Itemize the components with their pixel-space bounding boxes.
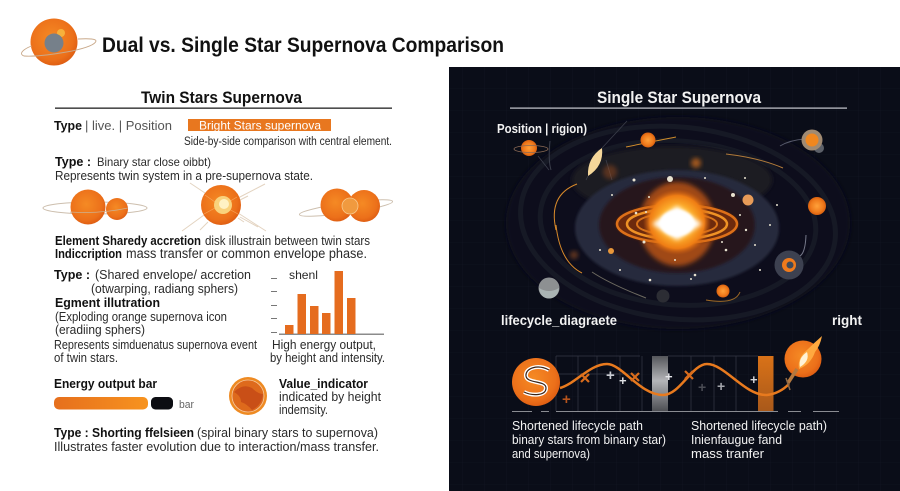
plus markers: + (619, 373, 627, 388)
icon: header star with orbit (22, 18, 96, 66)
icon: exploding star (182, 183, 266, 231)
panel: twin stars supernova (43, 89, 393, 454)
bar chart: energy output: shenl (289, 268, 318, 282)
text block: shortening lifetime: Illustrates faster evolution due to interaction/mass transfer. (54, 439, 379, 454)
bar: orange marker (758, 356, 774, 411)
text block: binary star: Represents twin system in a pre-supernova state. (55, 168, 313, 183)
badge: bright stars supernova: Bright Stars supernova (199, 118, 321, 132)
caption: left lifecycle: Shortened lifecycle path (512, 418, 643, 433)
caption: left lifecycle: binary stars from binaıry star) (512, 433, 666, 447)
bar chart: energy output: by height and intensity. (270, 351, 385, 365)
position label: Position | rigion) (497, 122, 587, 136)
heading: twin stars: Twin Stars Supernova (141, 89, 303, 107)
type and position row: Type (54, 118, 82, 133)
icon: binary stars with ring (43, 190, 147, 224)
text block: shortening lifetime: Type : Shorting ffelsieen (54, 425, 194, 440)
text block: element illustration: of twin stars. (54, 351, 118, 365)
heading: single star: Single Star Supernova (597, 89, 762, 107)
icon: merged stars (299, 188, 393, 222)
plus markers: + (562, 391, 571, 408)
star specks (599, 176, 778, 281)
lifecycle label: lifecycle_diagraete (501, 313, 617, 328)
bar chart: energy output: High energy output, (272, 338, 376, 352)
value indicator text: indicated by height (279, 390, 382, 404)
text block: shared envelope: (otwarping, radiang sphers) (91, 281, 238, 296)
text block: shared envelope (54, 267, 251, 296)
text block: binary star: Type : (55, 154, 91, 169)
caption: left lifecycle (512, 418, 666, 461)
bar chart: energy output (270, 268, 385, 365)
right label: right (832, 313, 862, 328)
planet: top right halo (802, 130, 824, 153)
curve: lifecycle path (560, 364, 789, 395)
caption: left lifecycle: and supernova) (512, 447, 590, 461)
text block: shared accretion: Element Sharedy accretion (55, 233, 201, 248)
text block: shared accretion: disk illustrain between twin stars (205, 234, 370, 248)
plus markers: + (698, 379, 706, 395)
plus markers: + (750, 372, 758, 387)
text block: shared envelope: Type : (54, 267, 90, 282)
moon: small orange (608, 248, 614, 254)
energy output bar (54, 376, 194, 411)
planet: ringed top left (514, 140, 549, 170)
text block: shared accretion: Indiccription (55, 247, 122, 261)
text block: shared envelope: (Shared envelope/ accretion (95, 267, 251, 282)
moon: pale orange (742, 194, 754, 206)
lifecycle diagram (512, 336, 839, 412)
galaxy illustration (506, 111, 850, 335)
text block: binary star (55, 154, 313, 183)
title: Dual vs. Single Star Supernova Comparison (102, 33, 504, 57)
icon: spiral star (512, 358, 560, 406)
text block: element illustration: (Exploding orange supernova icon (55, 309, 227, 324)
badge caption: Side-by-side comparison with central element. (184, 136, 392, 148)
plus markers (562, 367, 758, 408)
text block: element illustration: (eradiing sphers) (55, 322, 145, 337)
value indicator text: Value_indicator (279, 376, 368, 391)
text block: shortening lifetime (54, 425, 379, 454)
value indicator text: indemsity. (279, 403, 328, 417)
text block: shortening lifetime: (spiral binary stars to supernova) (197, 425, 378, 440)
energy output bar: bar (179, 399, 194, 411)
text block: element illustration: Represents simduenatus supernova event (54, 338, 257, 352)
comet (588, 148, 602, 176)
caption: right lifecycle (691, 418, 827, 461)
caption: right lifecycle: Shortened lifecycle path) (691, 418, 827, 433)
plus markers: + (606, 367, 615, 384)
planet: bottom (716, 284, 730, 298)
planet: top (640, 132, 656, 148)
text block: shared accretion: mass transfer or common envelope phase. (126, 246, 367, 261)
text block: element illustration (54, 295, 257, 365)
type and position row: | live. | Position (85, 118, 172, 133)
planet: grey bottom left (538, 278, 560, 298)
moon: dark (656, 290, 670, 302)
caption: right lifecycle: mass tranfer (691, 447, 764, 461)
planet: right (808, 197, 826, 215)
energy output bar: Energy output bar (54, 376, 157, 391)
plus markers: + (665, 369, 673, 384)
value indicator text (279, 376, 382, 417)
text block: element illustration: Egment illutration (55, 295, 160, 310)
planet: ring target (774, 250, 804, 280)
caption: right lifecycle: Inienfaugue fand (691, 433, 782, 447)
text block: binary star: Binary star close oibbt) (97, 155, 211, 169)
plus markers: + (717, 378, 725, 394)
panel: single star supernova (449, 67, 900, 491)
bar: grey marker (652, 356, 668, 411)
text block: shared accretion (55, 233, 370, 261)
orbit streaks (549, 137, 806, 301)
icon: supernova star (784, 336, 822, 390)
icon: value indicator (229, 377, 267, 415)
